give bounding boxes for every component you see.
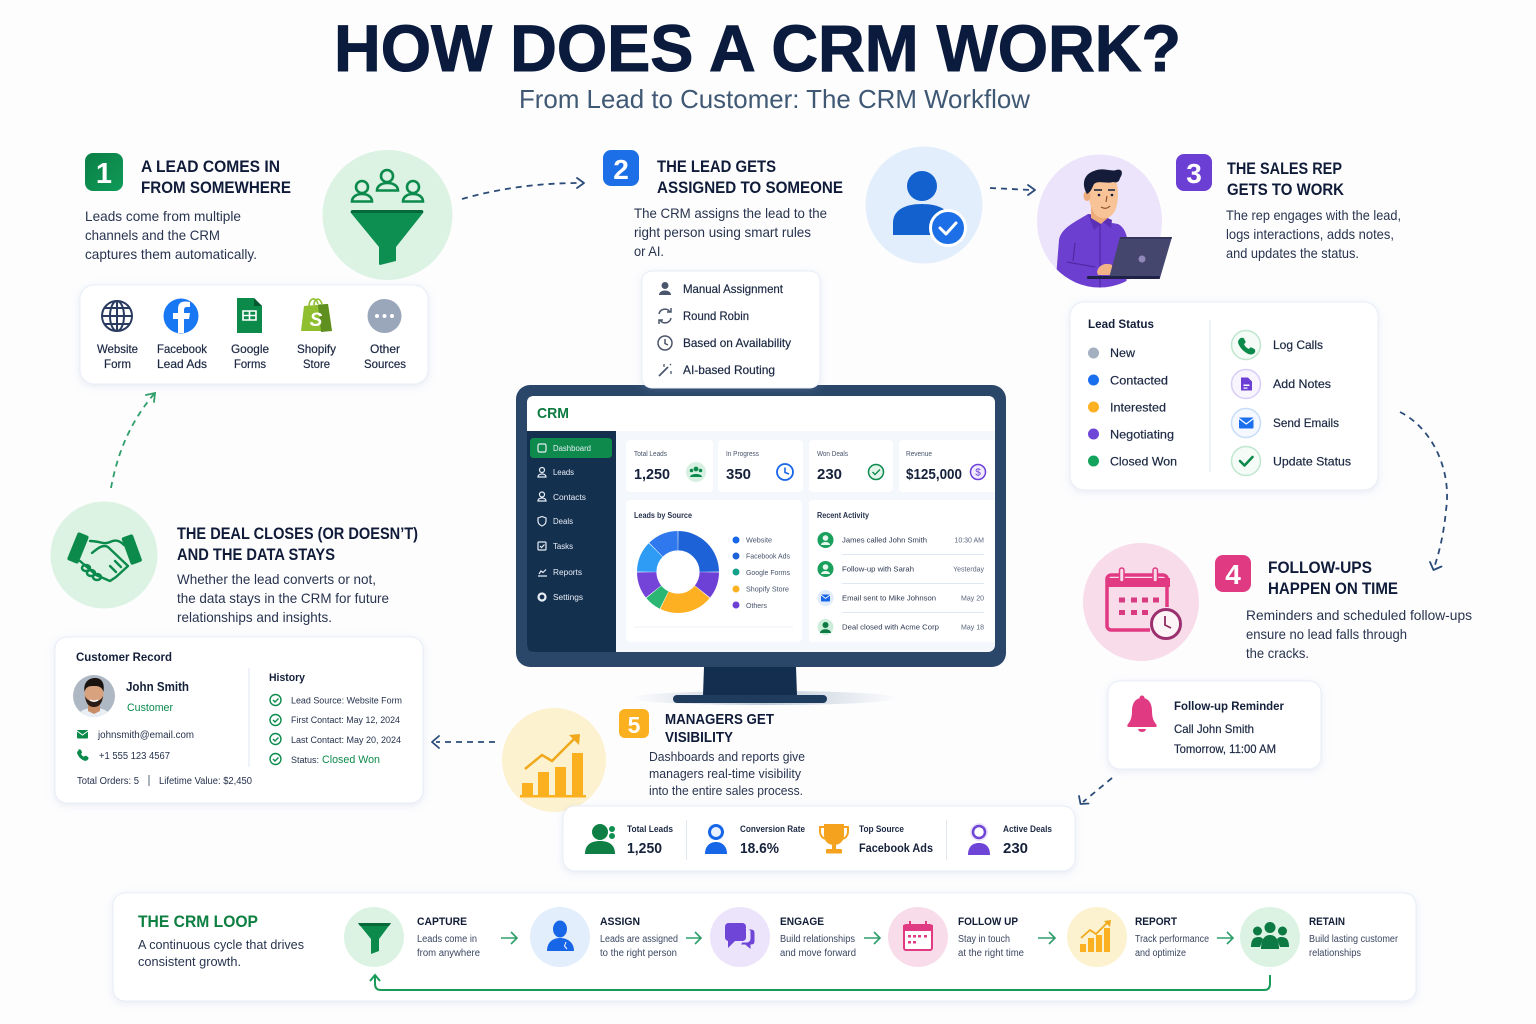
donut legend: Others	[746, 603, 767, 610]
customer totals: Lifetime Value: $2,450	[159, 776, 252, 787]
icon: handshake	[50, 502, 158, 608]
reminder text: Call John Smith	[1174, 722, 1254, 736]
customer history: Status:	[291, 755, 319, 765]
action: send emails: Send Emails	[1273, 416, 1339, 430]
metric: active deals	[968, 823, 1052, 857]
contact details	[77, 730, 194, 762]
panel: recent activity: May 18	[961, 624, 984, 632]
loop: retain: RETAIN	[1309, 916, 1345, 928]
panel: recent activity	[809, 500, 995, 642]
step 3 badge	[1176, 154, 1212, 191]
source labels: Sources	[364, 357, 406, 371]
arrow: step 5 to customer record	[432, 736, 495, 748]
step 3 body text: The rep engages with the lead,	[1226, 207, 1401, 223]
loop: follow up: FOLLOW UP	[958, 916, 1018, 928]
step 6 body text: Whether the lead converts or not,	[177, 571, 376, 587]
customer history: History	[269, 672, 306, 684]
step 6 body text: relationships and insights.	[177, 609, 332, 625]
step 3 badge: 3	[1186, 158, 1202, 189]
source labels: Shopify	[297, 342, 336, 356]
sidebar: Leads	[553, 468, 574, 477]
step 3 heading: THE SALES REP	[1227, 159, 1342, 178]
stat: total leads: Total Leads	[634, 451, 667, 458]
step 4 heading: FOLLOW-UPS	[1268, 558, 1372, 577]
sidebar: Contacts	[553, 493, 586, 502]
step 6 heading: THE DEAL CLOSES (OR DOESN’T)	[177, 524, 418, 543]
loop: assign: Leads are assigned	[600, 934, 678, 945]
loop: engage: Build relationships	[780, 934, 855, 945]
stat: revenue: $	[975, 468, 981, 478]
step 3 body text	[1226, 207, 1401, 261]
donut legend: Website	[746, 538, 772, 544]
panel: recent activity: Yesterday	[953, 566, 984, 574]
step 2 body text: right person using smart rules	[634, 224, 811, 240]
customer history: First Contact: May 12, 2024	[291, 715, 400, 725]
stat: won deals	[809, 440, 893, 492]
customer history: Lead Source: Website Form	[291, 696, 402, 706]
arrow: step 6 back to step 1	[111, 393, 155, 488]
customer history	[269, 672, 402, 766]
loop return arrow	[370, 975, 1270, 990]
sidebar: Dashboard	[553, 444, 591, 453]
illustration: sales rep with laptop	[1037, 154, 1172, 290]
panel: recent activity: James called John Smith	[842, 536, 927, 544]
step 3 heading: GETS TO WORK	[1227, 180, 1345, 199]
reminder text	[1174, 699, 1284, 756]
step 2 body text: The CRM assigns the lead to the	[634, 205, 827, 221]
stat: total leads: 1,250	[634, 466, 670, 483]
loop: capture: Leads come in	[417, 934, 477, 945]
loop: report	[1067, 907, 1209, 967]
icon: calendar with clock	[1083, 543, 1199, 661]
loop description: A continuous cycle that drives	[138, 937, 304, 952]
loop: report: REPORT	[1135, 916, 1177, 928]
arrow: step 1 to step 2	[462, 178, 584, 199]
step 6: deal closes	[50, 502, 418, 625]
step 1 heading: A LEAD COMES IN	[141, 157, 280, 176]
icon: round robin	[659, 308, 671, 324]
lead status list	[1088, 317, 1177, 468]
assignment method labels	[683, 282, 791, 377]
icon: AI wand	[659, 364, 671, 376]
lead status list: Closed Won	[1110, 454, 1177, 468]
step 1 body text: Leads come from multiple	[85, 208, 241, 224]
CRM logo: CRM	[537, 405, 569, 422]
metric: total leads	[585, 824, 673, 857]
panel: recent activity: 10:30 AM	[954, 538, 984, 544]
icon: assigned person	[866, 146, 982, 264]
icon: facebook	[164, 298, 198, 334]
loop: capture	[344, 907, 480, 967]
panel: customer record	[55, 637, 423, 803]
reminder text: Tomorrow, 11:00 AM	[1174, 742, 1276, 756]
step 5 body text: Dashboards and reports give	[649, 749, 805, 764]
step 5 badge	[619, 709, 649, 738]
assignment method labels: Round Robin	[683, 309, 749, 323]
stat: revenue: Revenue	[906, 451, 932, 458]
loop: report: Track performance	[1135, 934, 1209, 945]
source labels: Store	[303, 357, 330, 371]
customer name	[126, 679, 189, 714]
arrow: step 3 to step 4	[1400, 412, 1447, 570]
icon: growth chart	[502, 708, 606, 812]
loop: assign	[530, 907, 678, 967]
donut legend: Google Forms	[746, 570, 790, 577]
step 2: lead gets assigned	[603, 146, 982, 264]
icon: shopify bag: S	[310, 310, 323, 331]
loop step arrows	[501, 932, 1233, 944]
step 4 heading: HAPPEN ON TIME	[1268, 579, 1398, 598]
chart: leads by source	[626, 500, 802, 642]
metric: top source: Facebook Ads	[859, 841, 933, 855]
lead status list: Lead Status	[1088, 317, 1154, 331]
chart: leads by source: Leads by Source	[634, 511, 692, 520]
loop: follow up: Stay in touch	[958, 934, 1010, 945]
action: add notes: Add Notes	[1273, 377, 1331, 391]
donut legend: Facebook Ads	[746, 554, 790, 560]
panel: recent activity: Deal closed with Acme Corp	[842, 622, 939, 632]
action: log calls: Log Calls	[1273, 338, 1323, 352]
metric: top source: Top Source	[859, 824, 904, 834]
stat: won deals: 230	[817, 466, 842, 483]
contact details: +1 555 123 4567	[99, 751, 170, 762]
icon: funnel with people	[322, 150, 452, 280]
loop: follow up: at the right time	[958, 948, 1024, 959]
metric: active deals: Active Deals	[1003, 824, 1052, 834]
step 4 badge: 4	[1225, 559, 1241, 590]
step 4: follow-ups	[1083, 543, 1472, 661]
step 4 body text	[1246, 607, 1472, 661]
loop: retain: Build lasting customer	[1309, 934, 1399, 945]
step 4 heading	[1268, 558, 1398, 598]
sidebar: Reports	[553, 568, 582, 577]
source labels: Facebook	[157, 342, 208, 356]
arrow: step 4 to step 5	[1079, 778, 1112, 804]
step 5 body text: into the entire sales process.	[649, 783, 803, 798]
title: HOW DOES A CRM WORK?	[334, 11, 1181, 85]
panel: recent activity: Recent Activity	[817, 511, 869, 520]
step 4 body text: Reminders and scheduled follow-ups	[1246, 607, 1472, 623]
donut legend	[732, 536, 790, 610]
step 1 badge: 1	[96, 158, 112, 190]
lead status list: Negotiating	[1110, 428, 1174, 442]
source labels: Lead Ads	[157, 357, 207, 371]
reminder text: Follow-up Reminder	[1174, 699, 1284, 713]
step 1 body text: captures them automatically.	[85, 246, 257, 262]
step 5 heading	[665, 711, 774, 746]
step 5 body text	[649, 749, 805, 798]
step 1 heading	[141, 157, 291, 197]
metric: conversion rate	[705, 824, 805, 857]
step 2 badge	[603, 150, 639, 186]
loop: report: and optimize	[1135, 948, 1186, 959]
metric: conversion rate: 18.6%	[740, 840, 779, 857]
source labels	[97, 342, 406, 371]
source labels: Forms	[234, 357, 266, 371]
step 2 heading: THE LEAD GETS	[657, 157, 776, 176]
icon: other sources	[368, 299, 402, 333]
panel: the CRM loop	[113, 893, 1416, 1001]
loop: capture: CAPTURE	[417, 916, 467, 928]
step 5: manager visibility	[502, 708, 805, 812]
icon: manual assignment	[659, 282, 671, 295]
step 4 body text: the cracks.	[1246, 645, 1309, 661]
step 2 heading	[657, 157, 843, 197]
step 3 heading	[1227, 159, 1345, 199]
sidebar	[527, 431, 616, 652]
panel: lead sources	[80, 285, 428, 384]
source labels: Google	[231, 342, 269, 356]
lead status list: Interested	[1110, 400, 1166, 414]
loop: engage: ENGAGE	[780, 916, 824, 928]
loop: retain	[1240, 907, 1399, 967]
icon: google forms	[237, 298, 262, 333]
metric: active deals: 230	[1003, 840, 1028, 857]
loop: engage: and move forward	[780, 948, 856, 959]
lead status list: New	[1110, 346, 1135, 360]
lead status list: Contacted	[1110, 374, 1168, 388]
icon: shopify bag	[301, 299, 332, 332]
loop: engage	[710, 907, 856, 967]
stat: won deals: Won Deals	[817, 451, 848, 458]
metric: conversion rate: Conversion Rate	[740, 824, 805, 834]
step 1 heading: FROM SOMEWHERE	[141, 178, 291, 197]
step 5 heading: MANAGERS GET	[665, 711, 774, 728]
source labels: Website	[97, 342, 138, 356]
step 6 heading	[177, 524, 418, 564]
action: add notes	[1232, 370, 1331, 398]
step 2 body text: or AI.	[634, 243, 664, 259]
stat: revenue: $125,000	[906, 466, 962, 483]
step 3: sales rep	[1037, 154, 1401, 290]
record heading: Customer Record	[76, 650, 172, 664]
customer history: Closed Won	[322, 754, 380, 766]
customer name: John Smith	[126, 679, 189, 694]
stat: revenue	[899, 440, 995, 492]
step 6 body text	[177, 571, 389, 625]
source labels: Other	[370, 342, 400, 356]
stat: in progress: In Progress	[726, 451, 759, 458]
monitor stand	[630, 667, 900, 705]
arrow: step 2 to step 3	[990, 185, 1035, 195]
step 6 body text: the data stays in the CRM for future	[177, 590, 389, 606]
action: log calls	[1232, 330, 1323, 360]
action: update status	[1232, 446, 1351, 476]
step 2 body text	[634, 205, 827, 259]
loop description	[138, 937, 304, 969]
icon: bell	[1128, 696, 1156, 732]
stat: in progress: 350	[726, 466, 751, 483]
source labels: Form	[104, 357, 131, 371]
sidebar: Settings	[553, 593, 583, 602]
stat: in progress	[718, 440, 803, 492]
subtitle: From Lead to Customer: The CRM Workflow	[519, 84, 1030, 114]
step 1 body text	[85, 208, 257, 262]
step 3 body text: and updates the status.	[1226, 245, 1359, 261]
metric: total leads: Total Leads	[627, 824, 673, 834]
customer totals	[77, 775, 252, 787]
step 2 heading: ASSIGNED TO SOMEONE	[657, 178, 843, 197]
donut legend: Shopify Store	[746, 586, 789, 594]
panel: follow-up reminder	[1108, 681, 1321, 769]
panel: manager metrics	[563, 806, 1075, 871]
monitor: CRM dashboard	[516, 385, 1006, 705]
loop: capture: from anywhere	[417, 948, 480, 959]
assignment method labels: Based on Availability	[683, 336, 791, 350]
stat: total leads	[626, 440, 713, 492]
step 6 heading: AND THE DATA STAYS	[177, 545, 335, 564]
loop description: consistent growth.	[138, 954, 241, 969]
loop: assign: ASSIGN	[600, 916, 640, 928]
panel: assignment methods	[642, 271, 820, 388]
customer name: Customer	[127, 702, 173, 714]
loop heading: THE CRM LOOP	[138, 912, 258, 931]
customer history: Last Contact: May 20, 2024	[291, 735, 401, 745]
contact details: johnsmith@email.com	[97, 730, 194, 741]
panel: recent activity: Email sent to Mike Johnson	[842, 594, 936, 602]
loop: assign: to the right person	[600, 948, 677, 959]
step 3 body text: logs interactions, adds notes,	[1226, 226, 1394, 242]
step 4 badge	[1215, 555, 1251, 592]
metric: top source	[820, 824, 933, 855]
step 1 body text: channels and the CRM	[85, 227, 220, 243]
panel: recent activity: Follow-up with Sarah	[842, 564, 914, 574]
customer totals: Total Orders: 5	[77, 776, 139, 787]
step 5 badge: 5	[628, 712, 641, 738]
action: update status: Update Status	[1273, 454, 1351, 468]
step 5 body text: managers real-time visibility	[649, 766, 801, 781]
panel: lead status and rep actions	[1070, 302, 1378, 490]
metric: total leads: 1,250	[627, 840, 662, 857]
panel: recent activity: May 20	[961, 596, 984, 602]
donut	[647, 541, 709, 603]
action: send emails	[1232, 408, 1339, 438]
step 2 badge: 2	[613, 154, 629, 185]
sidebar: Deals	[553, 517, 573, 526]
step 5 heading: VISIBILITY	[665, 729, 733, 746]
icon: availability clock	[658, 336, 672, 350]
assignment method labels: Manual Assignment	[683, 282, 784, 296]
step 1: a lead comes in	[85, 150, 452, 280]
icon: globe	[102, 301, 132, 331]
loop: retain: relationships	[1309, 948, 1361, 959]
assignment method labels: AI-based Routing	[683, 363, 775, 377]
sidebar: Tasks	[553, 542, 573, 551]
step 4 body text: ensure no lead falls through	[1246, 626, 1407, 642]
step 1 badge	[85, 153, 123, 191]
customer avatar	[73, 675, 115, 720]
loop: follow up	[888, 907, 1024, 967]
